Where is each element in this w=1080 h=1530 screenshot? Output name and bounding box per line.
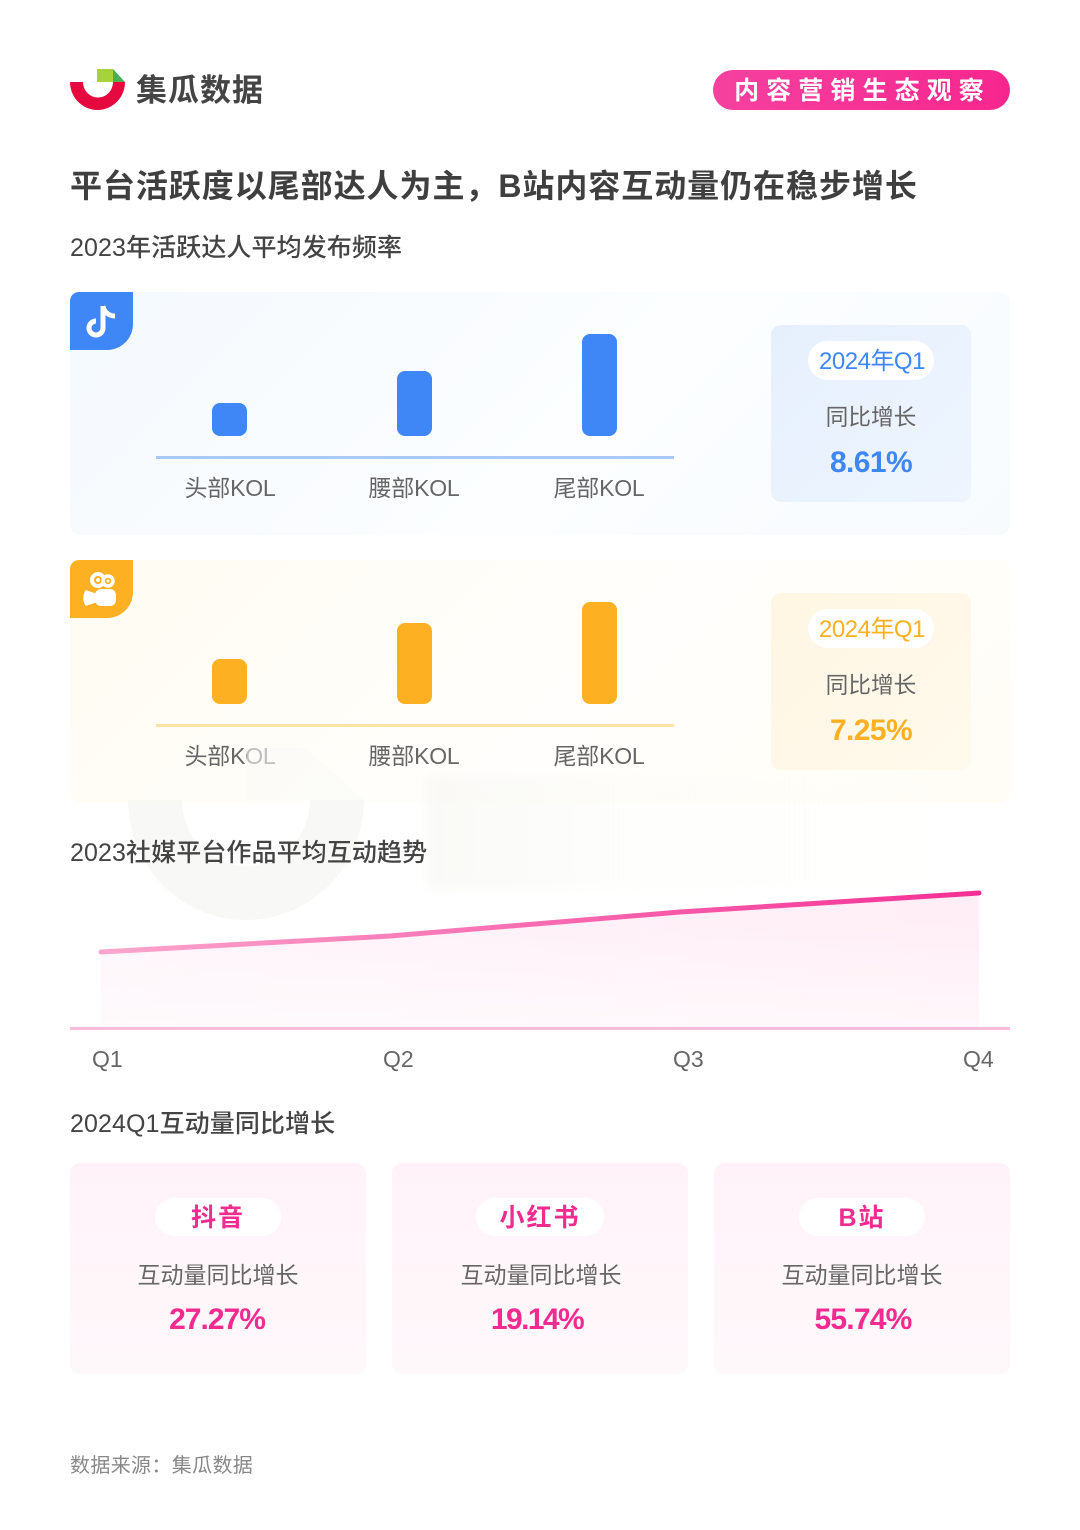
panel: bilibili yoy [714,1163,1010,1374]
logo mark [70,69,125,110]
watermark logo [128,748,364,920]
callout: kuaishou growth: 7.25% [830,714,912,747]
panel: bilibili yoy: B站 [838,1204,886,1232]
callout: douyin growth: 8.61% [830,446,912,479]
bar chart: douyin: 头部KOL [184,475,276,501]
bar chart: douyin [156,334,674,501]
panel: xiaohongshu yoy [392,1163,688,1374]
bar chart: douyin: 腰部KOL [368,475,460,501]
panel: kuaishou [70,560,1010,803]
panel: xiaohongshu yoy: 小红书 [499,1204,580,1232]
panel: douyin yoy: 抖音 [191,1204,245,1232]
header tag [713,70,1010,110]
logo wordmark: 集瓜数据 [136,73,264,108]
bar chart: kuaishou [156,602,674,769]
callout: douyin growth [771,325,971,502]
panel: douyin yoy [70,1163,366,1374]
axis labels: Q4 [963,1046,994,1072]
callout: kuaishou growth: 2024年Q1 [819,616,925,643]
panel: bilibili yoy: 互动量同比增长 [782,1262,942,1288]
panel: xiaohongshu yoy: 19.14% [491,1303,583,1336]
bar chart: kuaishou: 腰部KOL [368,743,460,769]
line chart [70,890,1010,1030]
panel: bilibili yoy: 55.74% [815,1303,911,1336]
panel: douyin [70,292,1010,535]
source note: 数据来源：集瓜数据 [70,1455,253,1477]
bar chart: kuaishou: 尾部KOL [553,743,645,769]
header tag: 内容营销生态观察 [734,77,991,105]
axis labels: Q2 [383,1046,414,1072]
panel: xiaohongshu yoy: 互动量同比增长 [460,1262,622,1288]
panel: douyin yoy: 互动量同比增长 [138,1262,298,1288]
title: 平台活跃度以尾部达人为主，B站内容互动量仍在稳步增长 [70,168,918,204]
panel: douyin yoy: 27.27% [169,1303,265,1336]
callout: douyin growth: 同比增长 [826,404,916,430]
axis labels: Q3 [673,1046,704,1072]
callout: douyin growth: 2024年Q1 [819,348,925,375]
heading: interaction trend: 2023社媒平台作品平均互动趋势 [70,839,427,867]
axis labels [92,1046,994,1072]
heading: yoy: 2024Q1互动量同比增长 [70,1110,335,1138]
axis labels: Q1 [92,1046,123,1072]
callout: kuaishou growth: 同比增长 [826,672,916,698]
icon: kuaishou [70,560,133,618]
bar chart: kuaishou: 头部KOL [184,743,276,769]
icon: douyin [70,292,133,350]
heading: posting frequency: 2023年活跃达人平均发布频率 [70,234,402,262]
callout: kuaishou growth [771,593,971,770]
bar chart: douyin: 尾部KOL [553,475,645,501]
logo [70,69,264,110]
